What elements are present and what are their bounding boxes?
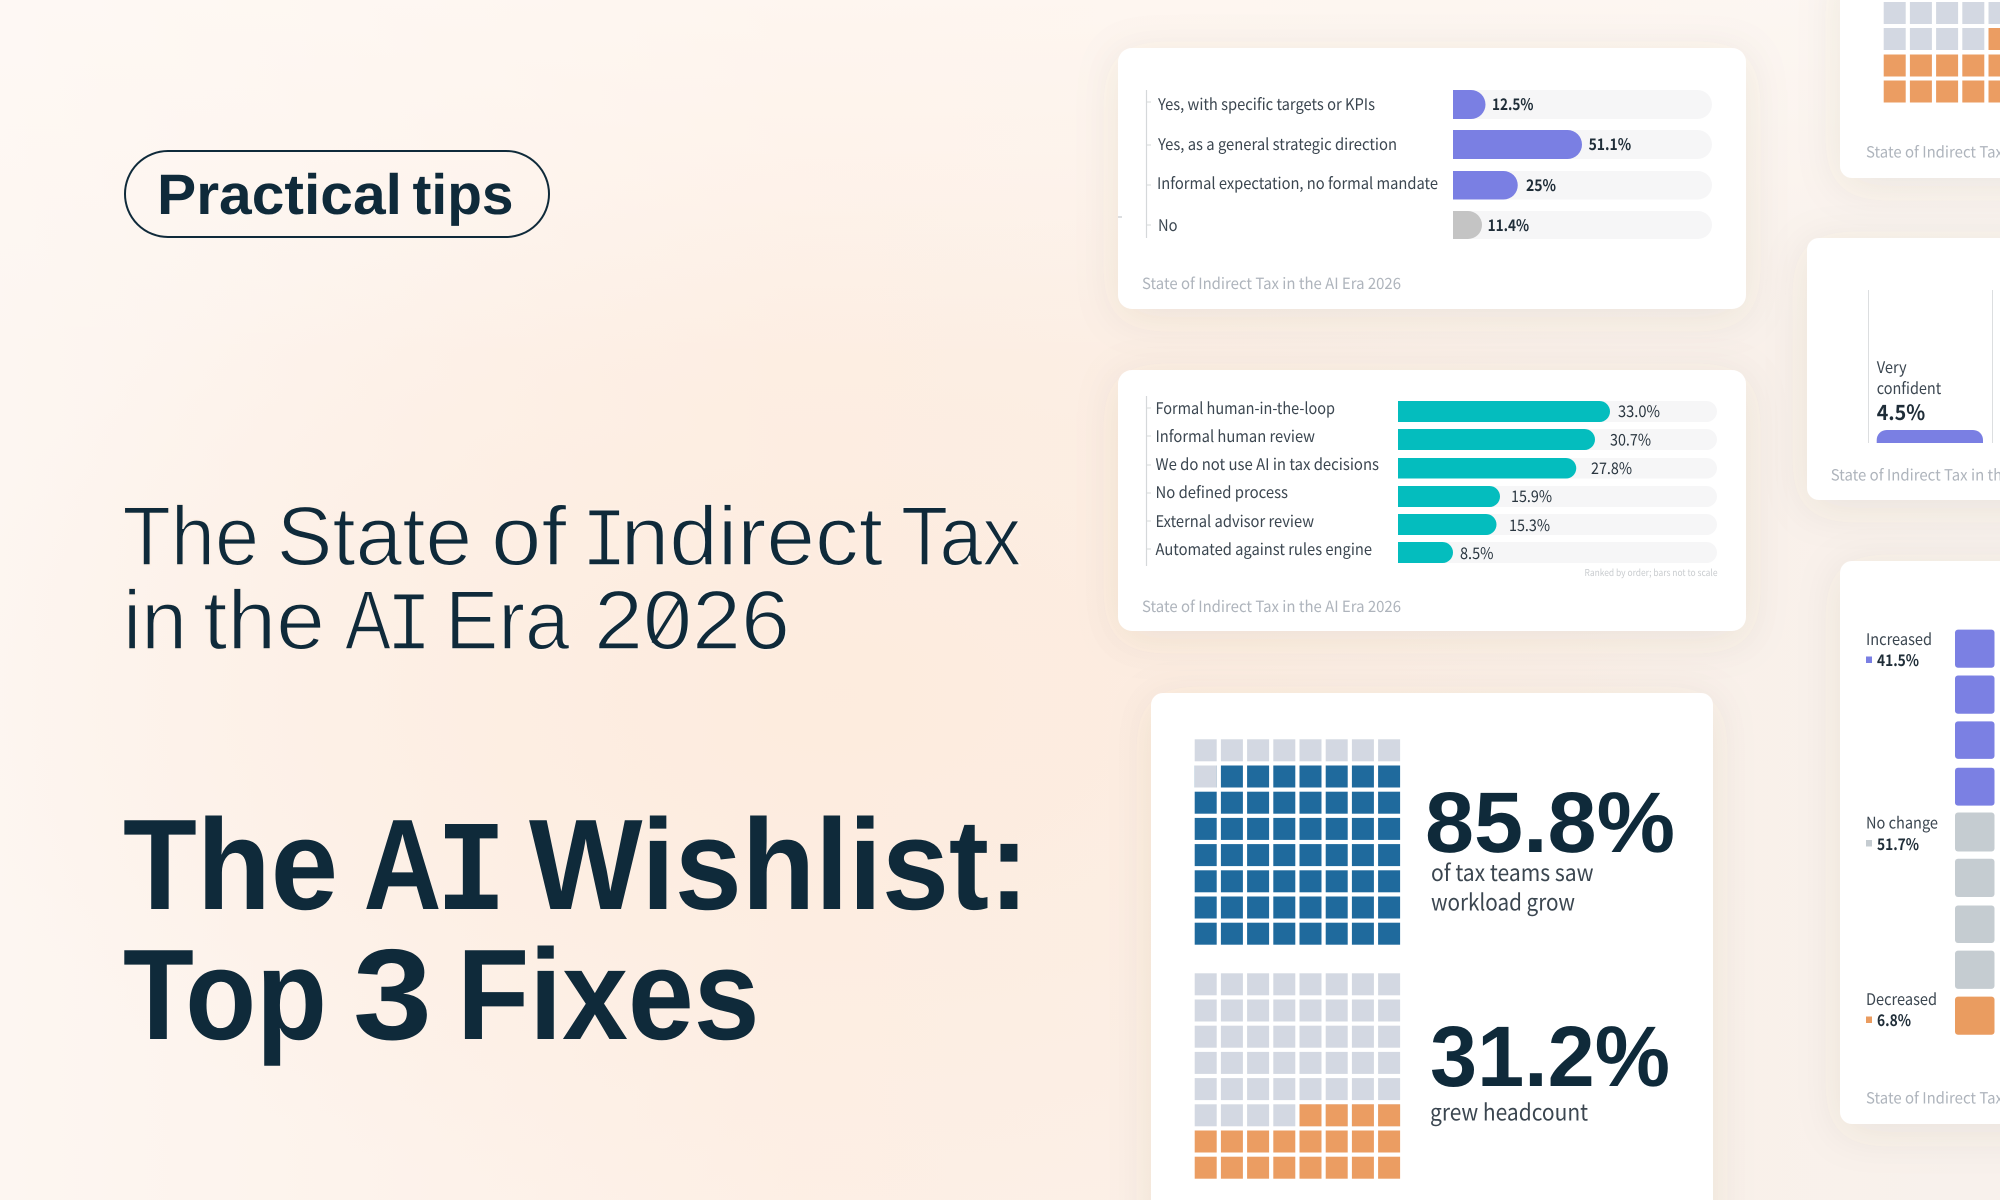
- stat: 31.2%: grew headcount: [1430, 1094, 1588, 1128]
- row: No defined process: [1156, 479, 1717, 507]
- stat: 31.2%: 31.2%: [1430, 1009, 1670, 1105]
- report title: The: [122, 489, 259, 583]
- main heading: I: [436, 802, 506, 948]
- row: Informal expectation, no formal mandate: [1157, 170, 1712, 200]
- row: Informal expectation, no formal mandate: 25%: [1526, 172, 1556, 196]
- report title: of: [491, 489, 567, 583]
- report title: 2026: [594, 573, 790, 667]
- report title: I: [581, 496, 628, 591]
- report title: the: [203, 573, 325, 667]
- row: Yes, as a general strategic direction: Yes, as a general strategic direction: [1157, 131, 1397, 155]
- row: Formal human-in-the-loop: [1156, 395, 1717, 422]
- row: Yes, as a general strategic direction: 51.1%: [1589, 131, 1631, 155]
- tag pill: Practical tips: tips: [412, 163, 514, 227]
- report title: [122, 489, 1021, 675]
- legend: Increased: 41.5%: [1877, 647, 1919, 671]
- main heading: Wishlist:: [529, 793, 1029, 937]
- stat: 85.8%: 85.8%: [1425, 775, 1675, 871]
- column: Very confident: Very: [1877, 354, 1907, 378]
- report title: ndirect: [621, 489, 883, 583]
- row: Informal human review: Informal human review: [1156, 423, 1315, 447]
- row: External advisor review: [1156, 508, 1717, 536]
- row: We do not use AI in tax decisions: We do not use AI in tax decisions: [1156, 451, 1379, 475]
- row: No: 11.4%: [1488, 212, 1529, 236]
- tag pill: Practical tips: Practical: [157, 163, 402, 227]
- stat: 85.8%: [1425, 775, 1675, 918]
- legend: No change: [1866, 810, 1938, 855]
- row: Informal human review: [1156, 423, 1717, 450]
- row: No: No: [1158, 212, 1178, 236]
- report title: Era: [445, 573, 570, 667]
- column: Very confident: confident: [1877, 375, 1941, 399]
- row: Formal human-in-the-loop: Formal human-in-the-loop: [1156, 395, 1335, 419]
- report title: A: [345, 573, 391, 667]
- stacked blocks: [1955, 630, 1994, 1035]
- panel: cropped change chart: [1840, 561, 2000, 1124]
- report title: I: [386, 580, 432, 675]
- main heading: Fixes: [457, 923, 760, 1067]
- waffle chart: workload 85.8%: [1195, 739, 1400, 945]
- legend: Increased: Increased: [1866, 626, 1932, 650]
- row: No defined process: No defined process: [1156, 479, 1288, 503]
- row: External advisor review: 15.3%: [1509, 512, 1550, 536]
- stat: 85.8%: of tax teams saw: [1431, 854, 1594, 888]
- row: No: [1158, 211, 1712, 239]
- source caption: State of Indirect Tax in the AI Era 2026: [1142, 272, 1401, 294]
- row: Yes, as a general strategic direction: [1157, 130, 1712, 159]
- main heading: 3: [353, 923, 432, 1067]
- chart note: Ranked by order; bars not to scale: [1584, 565, 1718, 579]
- panel: cropped confidence chart: [1807, 238, 2000, 500]
- row: Automated against rules engine: Automated against rules engine: [1156, 536, 1372, 560]
- row: Automated against rules engine: [1156, 536, 1717, 564]
- row: Informal human review: 30.7%: [1610, 426, 1651, 450]
- row: External advisor review: External advisor review: [1156, 508, 1314, 532]
- row: Yes, with specific targets or KPIs: 12.5%: [1492, 91, 1534, 115]
- main heading: Top: [123, 923, 327, 1067]
- row: Yes, with specific targets or KPIs: [1157, 90, 1712, 119]
- legend: Decreased: Decreased: [1866, 986, 1937, 1010]
- legend: No change: 51.7%: [1877, 831, 1919, 855]
- panel: cropped waffle card, top right: [1840, 0, 2000, 178]
- main heading: The: [123, 793, 338, 937]
- stat: 85.8%: workload grow: [1431, 884, 1575, 918]
- report title: in: [123, 573, 187, 667]
- row: Yes, with specific targets or KPIs: Yes, with specific targets or KPIs: [1157, 91, 1375, 115]
- panel: KPI mandate bar chart: [1118, 48, 1746, 309]
- row: Informal expectation, no formal mandate: Informal expectation, no formal mandate: [1157, 170, 1438, 194]
- legend: Decreased: [1866, 986, 1937, 1031]
- row: We do not use AI in tax decisions: [1156, 451, 1717, 479]
- source caption: State of Indirect Tax in the AI Era 2026: [1142, 595, 1401, 617]
- legend: Increased: [1866, 626, 1932, 671]
- legend: Decreased: 6.8%: [1877, 1007, 1911, 1031]
- main heading: A: [364, 793, 442, 937]
- main heading: [123, 793, 1029, 1067]
- column: Very confident: [1877, 354, 1983, 443]
- report title: Tax: [901, 489, 1021, 583]
- panel: human oversight bar chart: [1118, 370, 1746, 631]
- legend: No change: No change: [1866, 810, 1938, 834]
- row: We do not use AI in tax decisions: 27.8%: [1591, 455, 1632, 479]
- row: No defined process: 15.9%: [1511, 483, 1552, 507]
- row: Automated against rules engine: 8.5%: [1460, 540, 1494, 564]
- row: Formal human-in-the-loop: 33.0%: [1618, 398, 1660, 422]
- tag pill: Practical tips: [125, 151, 549, 237]
- panel: workload and headcount waffles: [1151, 693, 1713, 1200]
- waffle chart: headcount 31.2%: [1195, 973, 1400, 1179]
- report title: State: [277, 489, 472, 583]
- column: Very confident: 4.5%: [1877, 397, 1925, 427]
